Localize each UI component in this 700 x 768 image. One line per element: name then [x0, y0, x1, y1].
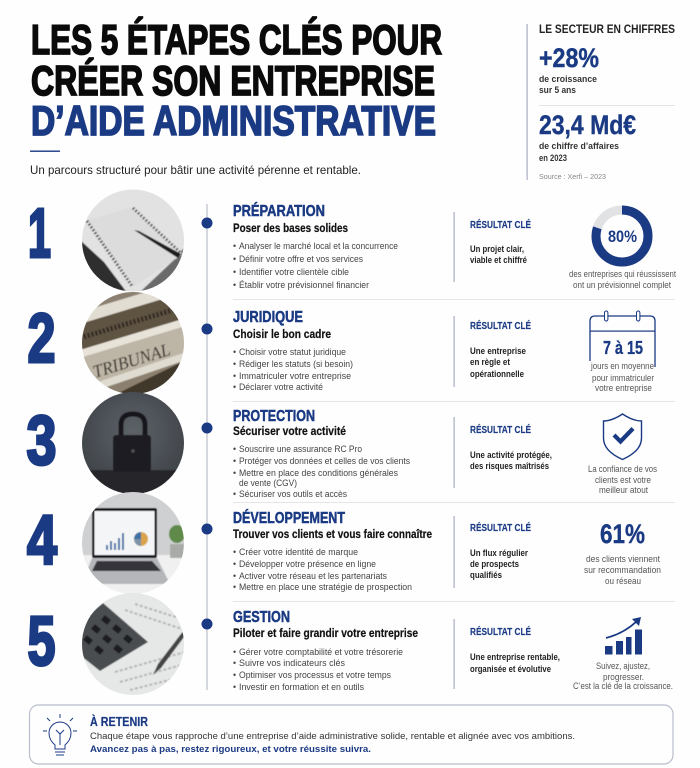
- callout text: Chaque étape vous rapproche d’une entreprise d’aide administrative solide, rentable et alignée avec vos ambitions.: [90, 731, 575, 742]
- caption: meilleur atout: [599, 485, 649, 495]
- dot: [202, 218, 212, 228]
- key result: Une entreprise rentable,: [470, 652, 560, 662]
- bullet list: Souscrire une assurance RC Pro: [239, 444, 362, 454]
- dot: [202, 422, 212, 434]
- heading: PROTECTION: [233, 408, 315, 425]
- bullet list: •: [233, 359, 236, 369]
- caption: Suivez, ajustez,: [596, 661, 650, 671]
- caption: ou réseau: [605, 576, 641, 586]
- caption: des entreprises qui réussissent: [569, 269, 676, 279]
- bullet list: •: [233, 444, 236, 454]
- photo: laptop with charts: [80, 490, 186, 596]
- caption: ont un prévisionnel complet: [573, 280, 672, 290]
- key result: RÉSULTAT CLÉ: [470, 521, 531, 534]
- step 3: protection: [26, 390, 658, 499]
- photo: notebook and pen: [80, 188, 186, 294]
- heading: DÉVELOPPEMENT: [233, 510, 345, 527]
- bullet list: •: [233, 254, 236, 264]
- icon: growth chart with arrow: [605, 617, 642, 654]
- bullet list: •: [233, 547, 236, 557]
- caption: votre entreprise: [595, 383, 652, 393]
- key result: Un projet clair,: [470, 244, 524, 254]
- bullet list: [233, 444, 411, 499]
- number 2: 2: [28, 299, 56, 377]
- subheading: Choisir le bon cadre: [233, 327, 331, 341]
- icon: calendar 7 à 15: 7 à 15: [603, 338, 643, 358]
- dot: [202, 524, 212, 534]
- bullet list: •: [233, 582, 236, 592]
- caption: clients est votre: [595, 475, 651, 485]
- dot: [202, 618, 212, 630]
- bullet list: Définir votre offre et vos services: [239, 254, 364, 264]
- key result: Un flux régulier: [470, 548, 528, 558]
- bullet list: •: [233, 241, 236, 251]
- caption: pour immatriculer: [592, 373, 654, 383]
- bullet list: •: [233, 267, 236, 277]
- step 5: gestion: [28, 590, 673, 696]
- key result: [454, 619, 560, 689]
- caption: [584, 554, 661, 586]
- panel: le secteur en chiffres: [526, 24, 675, 181]
- bullet list: Activer votre réseau et les partenariats: [239, 571, 388, 581]
- bullet list: •: [233, 682, 236, 692]
- stat: growth: [539, 43, 599, 95]
- photo: padlock: [80, 390, 186, 496]
- timeline line: [206, 204, 208, 690]
- key result: organisée et évolutive: [470, 664, 551, 674]
- callout heading: À RETENIR: [90, 714, 148, 729]
- subheading: Poser des bases solides: [233, 221, 348, 235]
- key result: viable et chiffré: [470, 255, 527, 265]
- bullet list: Choisir votre statut juridique: [239, 347, 346, 357]
- bullet list: Protéger vos données et celles de vos clients: [239, 456, 411, 466]
- key result: RÉSULTAT CLÉ: [470, 218, 531, 231]
- bullet list: Identifier votre clientèle cible: [239, 267, 349, 277]
- bullet list: •: [233, 371, 236, 381]
- bullet list: •: [233, 280, 236, 290]
- bullet list: [233, 347, 353, 392]
- bullet list: Analyser le marché local et la concurrence: [239, 241, 398, 251]
- bullet list: •: [233, 571, 236, 581]
- bullet list: •: [233, 456, 236, 466]
- key result: opérationnelle: [470, 369, 524, 379]
- bullet list: •: [233, 382, 236, 392]
- caption: [569, 269, 676, 290]
- caption: sur recommandation: [584, 565, 661, 575]
- key result: qualifiés: [470, 570, 502, 580]
- bullet list: [233, 241, 398, 290]
- stat: growth: de croissance: [539, 74, 597, 84]
- stat: growth: sur 5 ans: [539, 85, 576, 95]
- step 1: préparation: [28, 188, 676, 294]
- bullet list: [233, 547, 412, 592]
- caption: jours en moyenne: [590, 361, 654, 371]
- bullet list: •: [233, 489, 236, 499]
- stat: growth: +28%: [539, 43, 599, 73]
- number 1: 1: [28, 194, 51, 272]
- bullet list: Sécuriser vos outils et accès: [239, 489, 348, 499]
- key result: RÉSULTAT CLÉ: [470, 625, 531, 638]
- number 3: 3: [26, 401, 56, 479]
- step 4: développement: [27, 490, 661, 596]
- photo: tribunal facade: TRIBUNAL: [90, 339, 173, 382]
- bullet list: Rédiger les statuts (si besoin): [239, 359, 353, 369]
- bullet list: Établir votre prévisionnel financier: [239, 280, 369, 290]
- key result: [454, 316, 531, 387]
- key result: des risques maîtrisés: [470, 461, 549, 471]
- key result: Une entreprise: [470, 346, 526, 356]
- source: Source : Xerfi – 2023: [539, 174, 606, 181]
- bullet list: [233, 647, 403, 692]
- key result: [454, 516, 531, 588]
- key result: RÉSULTAT CLÉ: [470, 319, 531, 332]
- number 5: 5: [28, 602, 56, 680]
- bullet list: Mettre en place une stratégie de prospection: [239, 582, 412, 592]
- caption: progresser.: [603, 672, 644, 682]
- title: CRÉER SON ENTREPRISE: [31, 57, 435, 104]
- heading: GESTION: [233, 609, 290, 626]
- title: [31, 16, 442, 144]
- bullet list: Développer votre présence en ligne: [239, 559, 376, 569]
- bullet list: Créer votre identité de marque: [239, 547, 358, 557]
- photo: calculator and pen: [80, 590, 186, 696]
- key result: Une activité protégée,: [470, 450, 552, 460]
- caption: [588, 464, 658, 495]
- icon: light bulb: [43, 714, 77, 755]
- bullet list: •: [233, 559, 236, 569]
- caption: C’est la clé de la croissance.: [573, 681, 673, 691]
- callout emphasis: Avancez pas à pas, restez rigoureux, et votre réussite suivra.: [90, 744, 371, 755]
- key result: [454, 212, 531, 282]
- caption: des clients viennent: [586, 554, 661, 564]
- key result: RÉSULTAT CLÉ: [470, 423, 531, 436]
- photo: tribunal facade: [82, 292, 184, 393]
- key result: [454, 417, 552, 488]
- title: LES 5 ÉTAPES CLÉS POUR: [31, 16, 442, 63]
- title: D’AIDE ADMINISTRATIVE: [31, 97, 436, 144]
- subtitle: Un parcours structuré pour bâtir une activité pérenne et rentable.: [30, 163, 361, 177]
- bullet list: Investir en formation et en outils: [239, 682, 365, 692]
- callout: à retenir: [30, 705, 673, 764]
- bullet list: •: [233, 647, 236, 657]
- stat: revenue: en 2023: [539, 153, 567, 163]
- subheading: Sécuriser votre activité: [233, 424, 346, 438]
- dot: [202, 324, 212, 334]
- heading: JURIDIQUE: [233, 309, 303, 326]
- icon: calendar 7 à 15: [590, 311, 655, 367]
- heading: PRÉPARATION: [233, 203, 325, 220]
- donut chart 80%: 80%: [608, 227, 637, 246]
- bullet list: Immatriculer votre entreprise: [239, 371, 351, 381]
- stat: revenue: 23,4 Md€: [539, 110, 636, 140]
- bullet list: Suivre vos indicateurs clés: [239, 658, 346, 668]
- stat: revenue: de chiffre d’affaires: [539, 141, 619, 151]
- step 2: juridique: [28, 292, 656, 393]
- caption: [589, 361, 654, 393]
- bullet list: •: [233, 658, 236, 668]
- subheading: Piloter et faire grandir votre entreprise: [233, 626, 418, 640]
- bullet list: •: [233, 468, 236, 478]
- panel heading: LE SECTEUR EN CHIFFRES: [539, 24, 675, 36]
- stat 61%: 61%: [600, 519, 645, 549]
- icon: shield with check: [604, 414, 642, 460]
- key result: en règle et: [470, 357, 510, 367]
- subheading: Trouver vos clients et vous faire connaître: [233, 527, 432, 541]
- stat: revenue: [539, 110, 636, 163]
- bullet list: Mettre en place des conditions générales: [239, 468, 399, 478]
- bullet list: Gérer votre comptabilité et votre trésorerie: [239, 647, 403, 657]
- donut chart 80%: [596, 210, 648, 262]
- key result: de prospects: [470, 559, 519, 569]
- caption: [573, 661, 673, 691]
- bullet list: •: [233, 347, 236, 357]
- bullet list: Optimiser vos processus et votre temps: [239, 670, 392, 680]
- bullet list: de vente (CGV): [239, 478, 297, 488]
- number 4: 4: [27, 501, 57, 579]
- bullet list: Déclarer votre activité: [239, 382, 323, 392]
- bullet list: •: [233, 670, 236, 680]
- title accent rule: [30, 150, 60, 152]
- caption: La confiance de vos: [588, 464, 658, 474]
